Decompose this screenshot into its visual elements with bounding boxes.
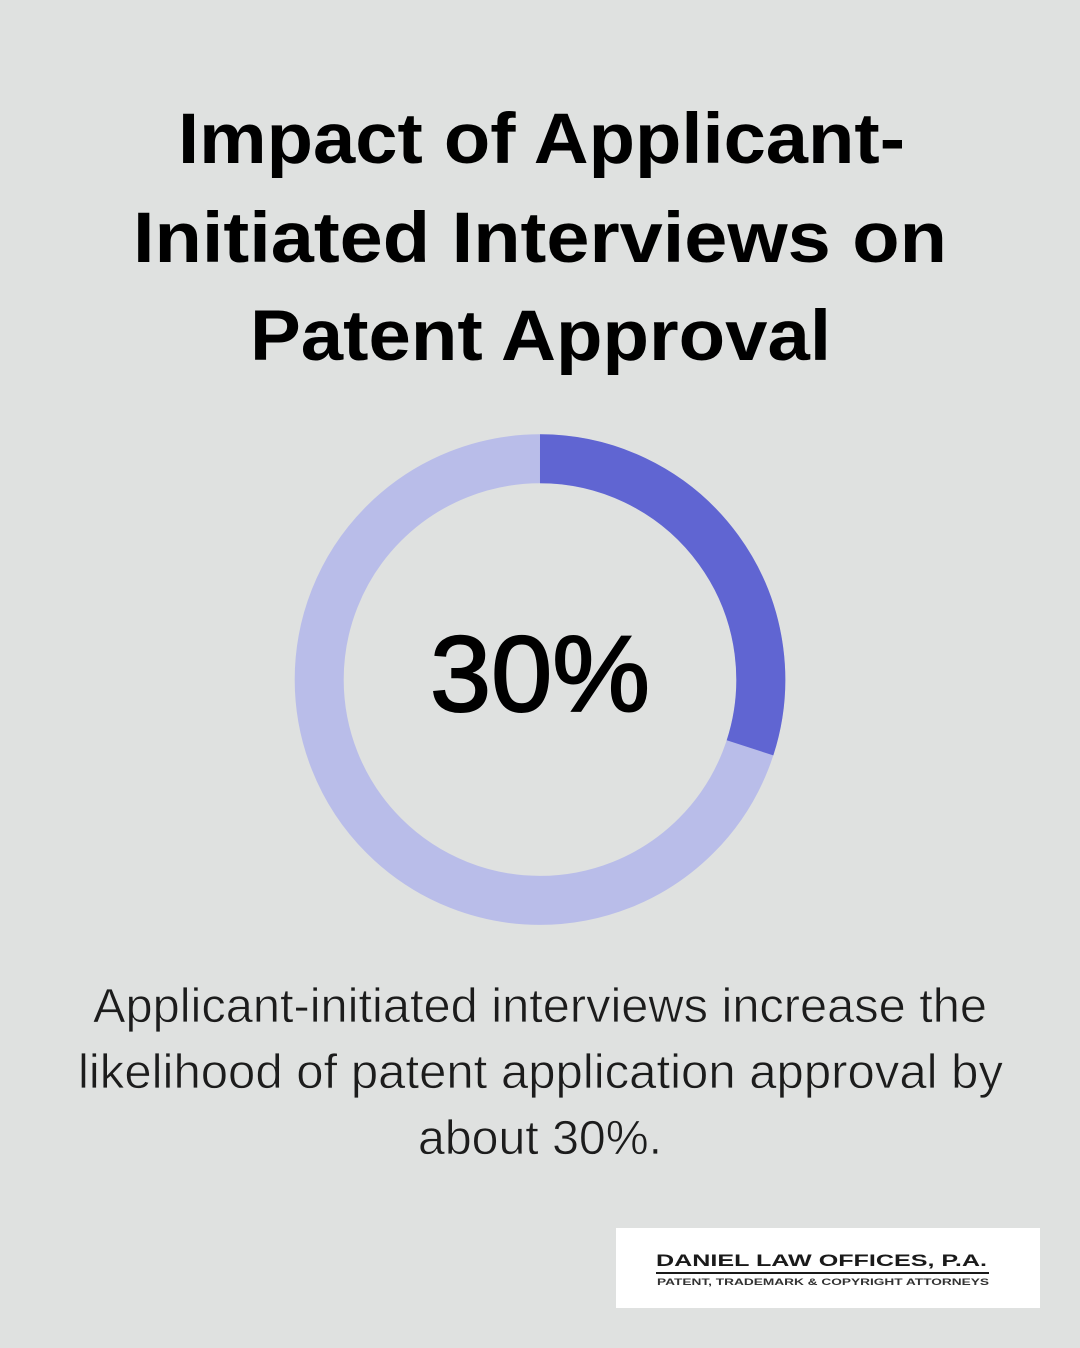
title (133, 100, 947, 376)
logo tagline: PATENT, TRADEMARK & COPYRIGHT ATTORNEYS (657, 1277, 989, 1287)
description text: Applicant-initiated interviews increase the (93, 980, 987, 1033)
ring highlighted 30% segment (540, 459, 761, 748)
central percentage: 30% (430, 613, 650, 734)
logo name: DANIEL LAW OFFICES, P.A. (656, 1252, 987, 1270)
logo background (616, 1228, 1040, 1308)
ring track (319, 459, 761, 900)
logo rule (656, 1272, 989, 1274)
title: Initiated Interviews on (133, 199, 947, 278)
donut chart: 30% (319, 459, 761, 900)
description text (78, 980, 1003, 1165)
title: Impact of Applicant- (178, 100, 905, 179)
description text: about 30%. (418, 1112, 662, 1165)
logo: Daniel Law Offices (616, 1228, 1040, 1308)
title: Patent Approval (250, 297, 831, 376)
description text: likelihood of patent application approval by (78, 1046, 1003, 1099)
